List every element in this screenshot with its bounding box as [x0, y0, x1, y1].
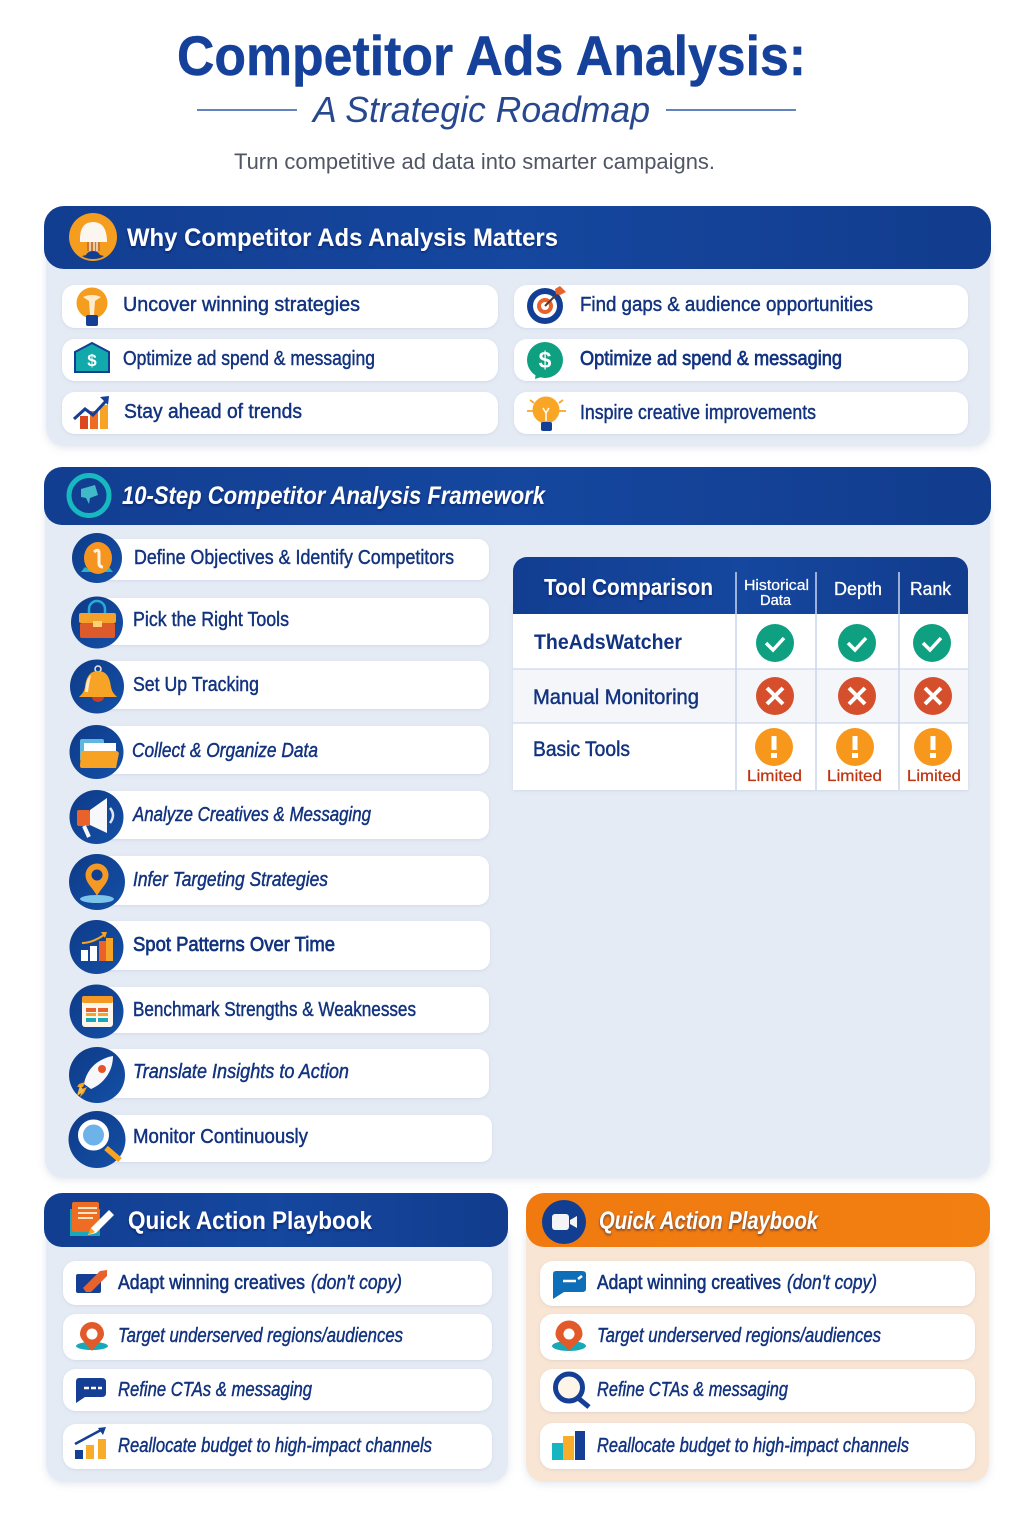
icon: dollar speech bubble: [527, 342, 563, 379]
action: refine ctas: [63, 1369, 492, 1411]
step 5: Analyze Creatives & Messaging: [132, 804, 371, 826]
icon: location pin: [80, 864, 114, 903]
title: Competitor Ads Analysis:: [177, 24, 806, 87]
action: target underserved regions: Target underserved regions/audiences: [597, 1325, 881, 1347]
icon: dollar speech bubble: $: [539, 347, 552, 373]
section header: playbook blue: [44, 1193, 508, 1247]
action: adapt winning creatives: (don't copy): [311, 1272, 402, 1294]
item: inspire creative improvements: Inspire creative improvements: [580, 402, 816, 424]
action: adapt winning creatives: Adapt winning creatives: [118, 1272, 305, 1294]
table heading: Tool Comparison: [544, 574, 713, 600]
panel: why competitor ads analysis matters: [44, 206, 991, 446]
row: manual monitoring: [533, 677, 952, 715]
step 7: [70, 920, 490, 974]
step 5: [70, 790, 489, 844]
item: stay ahead of trends: [62, 392, 498, 434]
panel: quick action playbook, blue: [44, 1193, 508, 1482]
step 7: Spot Patterns Over Time: [133, 934, 335, 956]
action: reallocate budget: [63, 1424, 492, 1469]
action: refine ctas: Refine CTAs & messaging: [118, 1379, 312, 1401]
icon: bulb: [76, 288, 108, 326]
step 10: [68, 1111, 492, 1168]
row: basic tools: Limited: [747, 768, 802, 785]
action: adapt winning creatives: (don't copy): [787, 1272, 877, 1294]
action: reallocate budget: Reallocate budget to high-impact channels: [118, 1435, 432, 1457]
step 2: Pick the Right Tools: [133, 609, 289, 631]
step 8: [70, 984, 489, 1038]
icon: message bubble: [76, 1378, 106, 1403]
icon: target: [527, 286, 566, 324]
icon: calendar: [82, 996, 113, 1027]
step 1: [72, 533, 489, 583]
section header: why it matters: Why Competitor Ads Analysis Matters: [127, 224, 558, 252]
section header: framework: 10-Step Competitor Analysis Framework: [122, 482, 546, 510]
icon: brush on card: [76, 1270, 107, 1293]
item: uncover winning strategies: [62, 285, 498, 328]
action: target underserved regions: [540, 1314, 975, 1360]
action: refine ctas: Refine CTAs & messaging: [597, 1379, 788, 1401]
panel: 10-step framework: [44, 467, 991, 1178]
row: theadswatcher: [534, 624, 951, 662]
item: optimize ad spend, left: [62, 339, 498, 381]
item: optimize ad spend, right: Optimize ad spend & messaging: [580, 348, 842, 370]
icon: magnifier: [80, 1122, 120, 1160]
step 6: Infer Targeting Strategies: [133, 869, 328, 891]
icon: dollar tag: [75, 343, 109, 372]
step 4: [70, 725, 489, 779]
row: manual monitoring: Manual Monitoring: [533, 686, 699, 709]
subtitle: A Strategic Roadmap: [311, 89, 650, 130]
section header: playbook blue: Quick Action Playbook: [128, 1207, 372, 1235]
row: theadswatcher: TheAdsWatcher: [534, 631, 682, 654]
icon: notes and pencil: [70, 1202, 114, 1236]
action: reallocate budget: [540, 1423, 975, 1469]
icon: step one: [81, 542, 113, 574]
tagline: Turn competitive ad data into smarter campaigns.: [234, 149, 715, 174]
column: historical data: Data: [760, 593, 792, 609]
row: basic tools: Limited: [907, 768, 961, 785]
step 8: Benchmark Strengths & Weaknesses: [133, 999, 416, 1021]
row: basic tools: Limited: [827, 768, 882, 785]
tool comparison table: [513, 557, 968, 790]
step 4: Collect & Organize Data: [132, 740, 318, 762]
action: refine ctas: [540, 1369, 975, 1412]
icon: blue bubble: [553, 1271, 586, 1299]
panel: quick action playbook, orange: [526, 1193, 990, 1482]
icon: budget chart: [75, 1427, 106, 1459]
item: optimize ad spend, right: [514, 339, 968, 381]
section header: framework: [44, 467, 991, 525]
icon: target pin: [552, 1320, 586, 1351]
section header: playbook orange: [526, 1193, 990, 1247]
column: depth: Depth: [834, 579, 882, 599]
action: target underserved regions: Target underserved regions/audiences: [118, 1325, 403, 1347]
section header: why it matters: [44, 206, 991, 269]
column: historical data: Historical: [744, 578, 809, 594]
icon: rocket: [77, 1056, 113, 1097]
step 2: [71, 596, 489, 648]
item: optimize ad spend, left: Optimize ad spend & messaging: [123, 348, 375, 370]
section header: playbook orange: Quick Action Playbook: [599, 1207, 819, 1235]
step 10: Monitor Continuously: [133, 1126, 308, 1148]
row: basic tools: [533, 728, 961, 785]
item: inspire creative improvements: [514, 392, 968, 434]
icon: folder: [80, 739, 119, 768]
icon: header light bulb: [69, 213, 117, 261]
item: stay ahead of trends: Stay ahead of trends: [124, 401, 302, 423]
item: uncover winning strategies: Uncover winning strategies: [123, 294, 360, 316]
action: adapt winning creatives: [63, 1261, 492, 1305]
item: find gaps: Find gaps & audience opportunities: [580, 294, 873, 316]
action: target underserved regions: [63, 1314, 492, 1360]
step 9: Translate Insights to Action: [133, 1061, 349, 1083]
icon: magnifier: [556, 1374, 589, 1407]
column: rank: Rank: [910, 579, 952, 599]
icon: framework badge: [69, 476, 109, 516]
column: historical data: [744, 578, 809, 609]
icon: chart over time: [81, 932, 113, 961]
icon: toolbox: [79, 601, 116, 638]
icon: rising chart: [74, 396, 109, 429]
icon: bell: [79, 666, 117, 702]
icon: bar chart: [552, 1431, 585, 1460]
step 9: [69, 1047, 489, 1103]
action: reallocate budget: Reallocate budget to high-impact channels: [597, 1435, 909, 1457]
row: basic tools: Basic Tools: [533, 738, 630, 761]
step 6: [69, 854, 489, 910]
action: adapt winning creatives: [540, 1261, 975, 1306]
item: find gaps: [514, 285, 968, 328]
icon: megaphone: [77, 798, 113, 837]
step 3: Set Up Tracking: [133, 674, 259, 696]
step 3: [70, 660, 489, 714]
action: adapt winning creatives: Adapt winning creatives: [597, 1272, 781, 1294]
icon: idea bulb: [527, 396, 566, 431]
icon: dollar tag: $: [87, 351, 97, 370]
step 1: Define Objectives & Identify Competitors: [134, 547, 454, 569]
icon: video camera: [542, 1200, 586, 1244]
icon: target pin: [76, 1322, 108, 1351]
